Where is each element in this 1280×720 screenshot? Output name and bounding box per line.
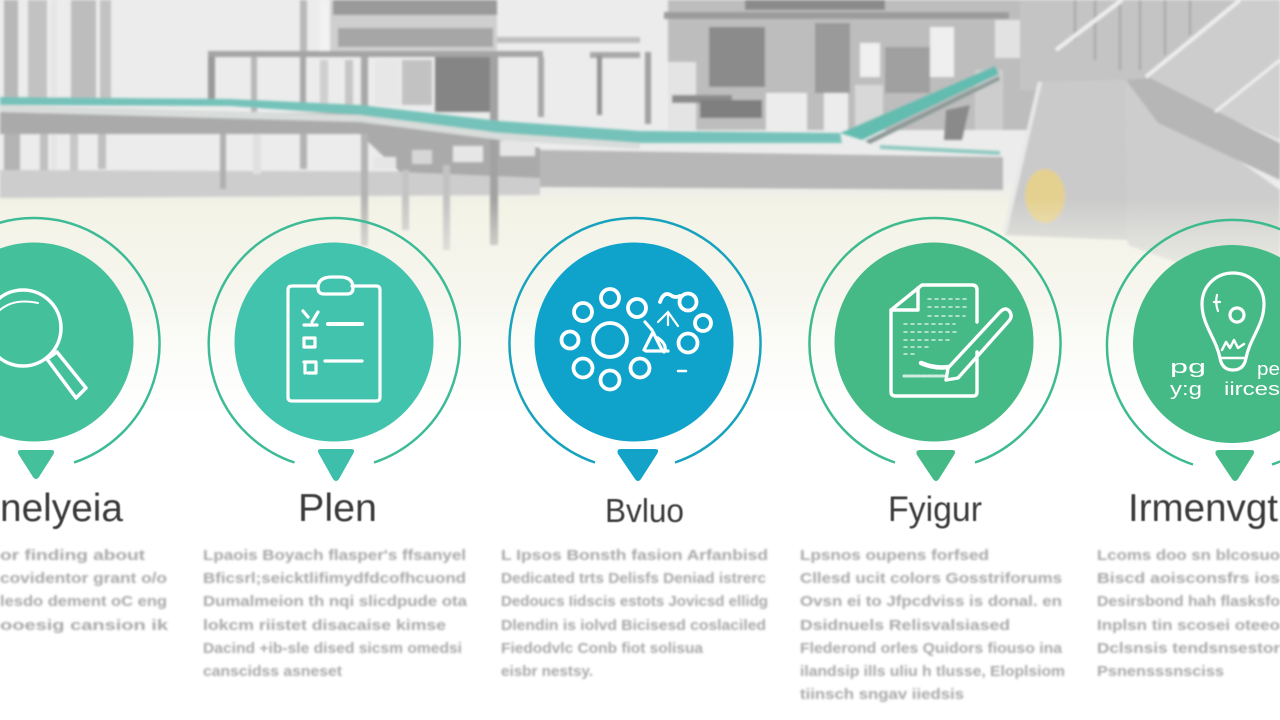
conveyor beam <box>0 112 540 178</box>
medallion <box>1025 169 1065 223</box>
heading: nelyeia <box>0 487 123 530</box>
ring <box>0 218 160 462</box>
description: Desirsbond hah flasksfo <box>1097 593 1280 610</box>
background: factory production line <box>0 0 1280 300</box>
ring <box>810 218 1060 462</box>
circle <box>834 242 1034 442</box>
description: Psnensssnsciss <box>1097 663 1224 680</box>
description: Lpsnos oupens forfsed <box>800 547 989 564</box>
description: canscidss asneset <box>203 663 342 680</box>
teal conveyor belt <box>0 66 1000 155</box>
description <box>1097 547 1280 680</box>
step 5: improvement <box>1097 220 1280 680</box>
description: L Ipsos Bonsth fasion Arfanbisd <box>501 547 768 564</box>
icon caption glyphs <box>1170 357 1280 399</box>
step 4: report <box>800 218 1065 703</box>
description: Biscd aoisconsfrs ios <box>1097 570 1280 587</box>
icon: lightbulb <box>1202 273 1264 370</box>
pointer <box>1215 450 1254 481</box>
lower floor band <box>0 170 540 198</box>
circle <box>534 242 734 442</box>
heading: Fyigur <box>888 490 982 529</box>
icon: document and pencil <box>891 285 1011 396</box>
description: Dumalmeion th nqi slicdpude ota <box>203 593 468 610</box>
icon: gears <box>562 289 711 390</box>
pointer <box>916 450 955 481</box>
description: lokcm riistet disacaise kimse <box>203 617 446 634</box>
central tower machinery <box>208 0 651 250</box>
description: Dacind +ib-sle dised sicsm omedsi <box>203 640 462 657</box>
ring <box>209 218 460 462</box>
description: Dedicated trts Delisfs Deniad istrerc <box>501 570 766 587</box>
stairs and hopper <box>1005 0 1280 300</box>
description: Ovsn ei to Jfpcdviss is donal. en <box>800 593 1062 610</box>
icon: magnifying glass <box>0 290 86 398</box>
step 2: plan <box>203 218 468 680</box>
heading: Irmenvgt <box>1128 487 1278 530</box>
under-beam openings <box>373 141 535 169</box>
description: Dclsnsis tendsnsestor <box>1097 640 1280 657</box>
icon: clipboard <box>288 277 380 401</box>
ring <box>1107 220 1280 464</box>
description <box>501 547 768 680</box>
description: Dsidnuels Relisvalsiased <box>800 617 1010 634</box>
heading: Plen <box>298 487 377 530</box>
circle <box>234 242 434 442</box>
description: Cllesd ucit colors Gosstriforums <box>800 570 1062 587</box>
pointer <box>617 449 658 481</box>
description: Flederond orles Quidors fiouso ina <box>800 640 1063 657</box>
right machinery <box>664 0 1040 140</box>
left pipe columns <box>4 0 111 195</box>
pointer <box>318 449 354 481</box>
description: Inplsn tin scosei oteeo <box>1097 617 1280 634</box>
description: Fiedodvlc Conb fiot solisua <box>501 640 704 657</box>
pointer <box>18 450 54 479</box>
description: Dlendin is iolvd Bicisesd coslaciled <box>501 617 766 634</box>
icon caption glyphs: iirces <box>1224 379 1280 399</box>
icon caption glyphs: y:g <box>1170 379 1202 399</box>
description: Dedoucs Iidscis estots Jovicsd ellidg <box>501 593 768 610</box>
step 3: build <box>501 218 768 680</box>
description: eisbr nestsy. <box>501 663 593 680</box>
description: Bficsrl;seicktlifimydfdcofhcuond <box>203 570 466 587</box>
circle <box>1133 245 1280 443</box>
description: Lpaois Boyach flasper's ffsanyel <box>203 547 466 564</box>
description: ilandsip ills uliu h tlusse, Eloplsiom <box>800 663 1065 680</box>
description: lesdo dement oC eng <box>0 593 167 610</box>
description <box>203 547 468 680</box>
description: ooesig cansion ik <box>0 617 169 634</box>
icon caption glyphs: pe <box>1257 359 1280 379</box>
description <box>800 547 1065 703</box>
heading: Bvluo <box>605 492 684 529</box>
background fade <box>0 198 1280 338</box>
step 1: analysis <box>0 218 169 634</box>
icon caption glyphs: pg <box>1170 357 1206 377</box>
circle <box>0 242 134 442</box>
ring <box>510 218 760 462</box>
description: Lcoms doo sn blcosuo <box>1097 547 1280 564</box>
description: covidentor grant o/o <box>0 570 167 587</box>
description <box>0 547 169 634</box>
description: or finding about <box>0 547 145 564</box>
description: tiinsch sngav iiedsis <box>800 686 964 703</box>
